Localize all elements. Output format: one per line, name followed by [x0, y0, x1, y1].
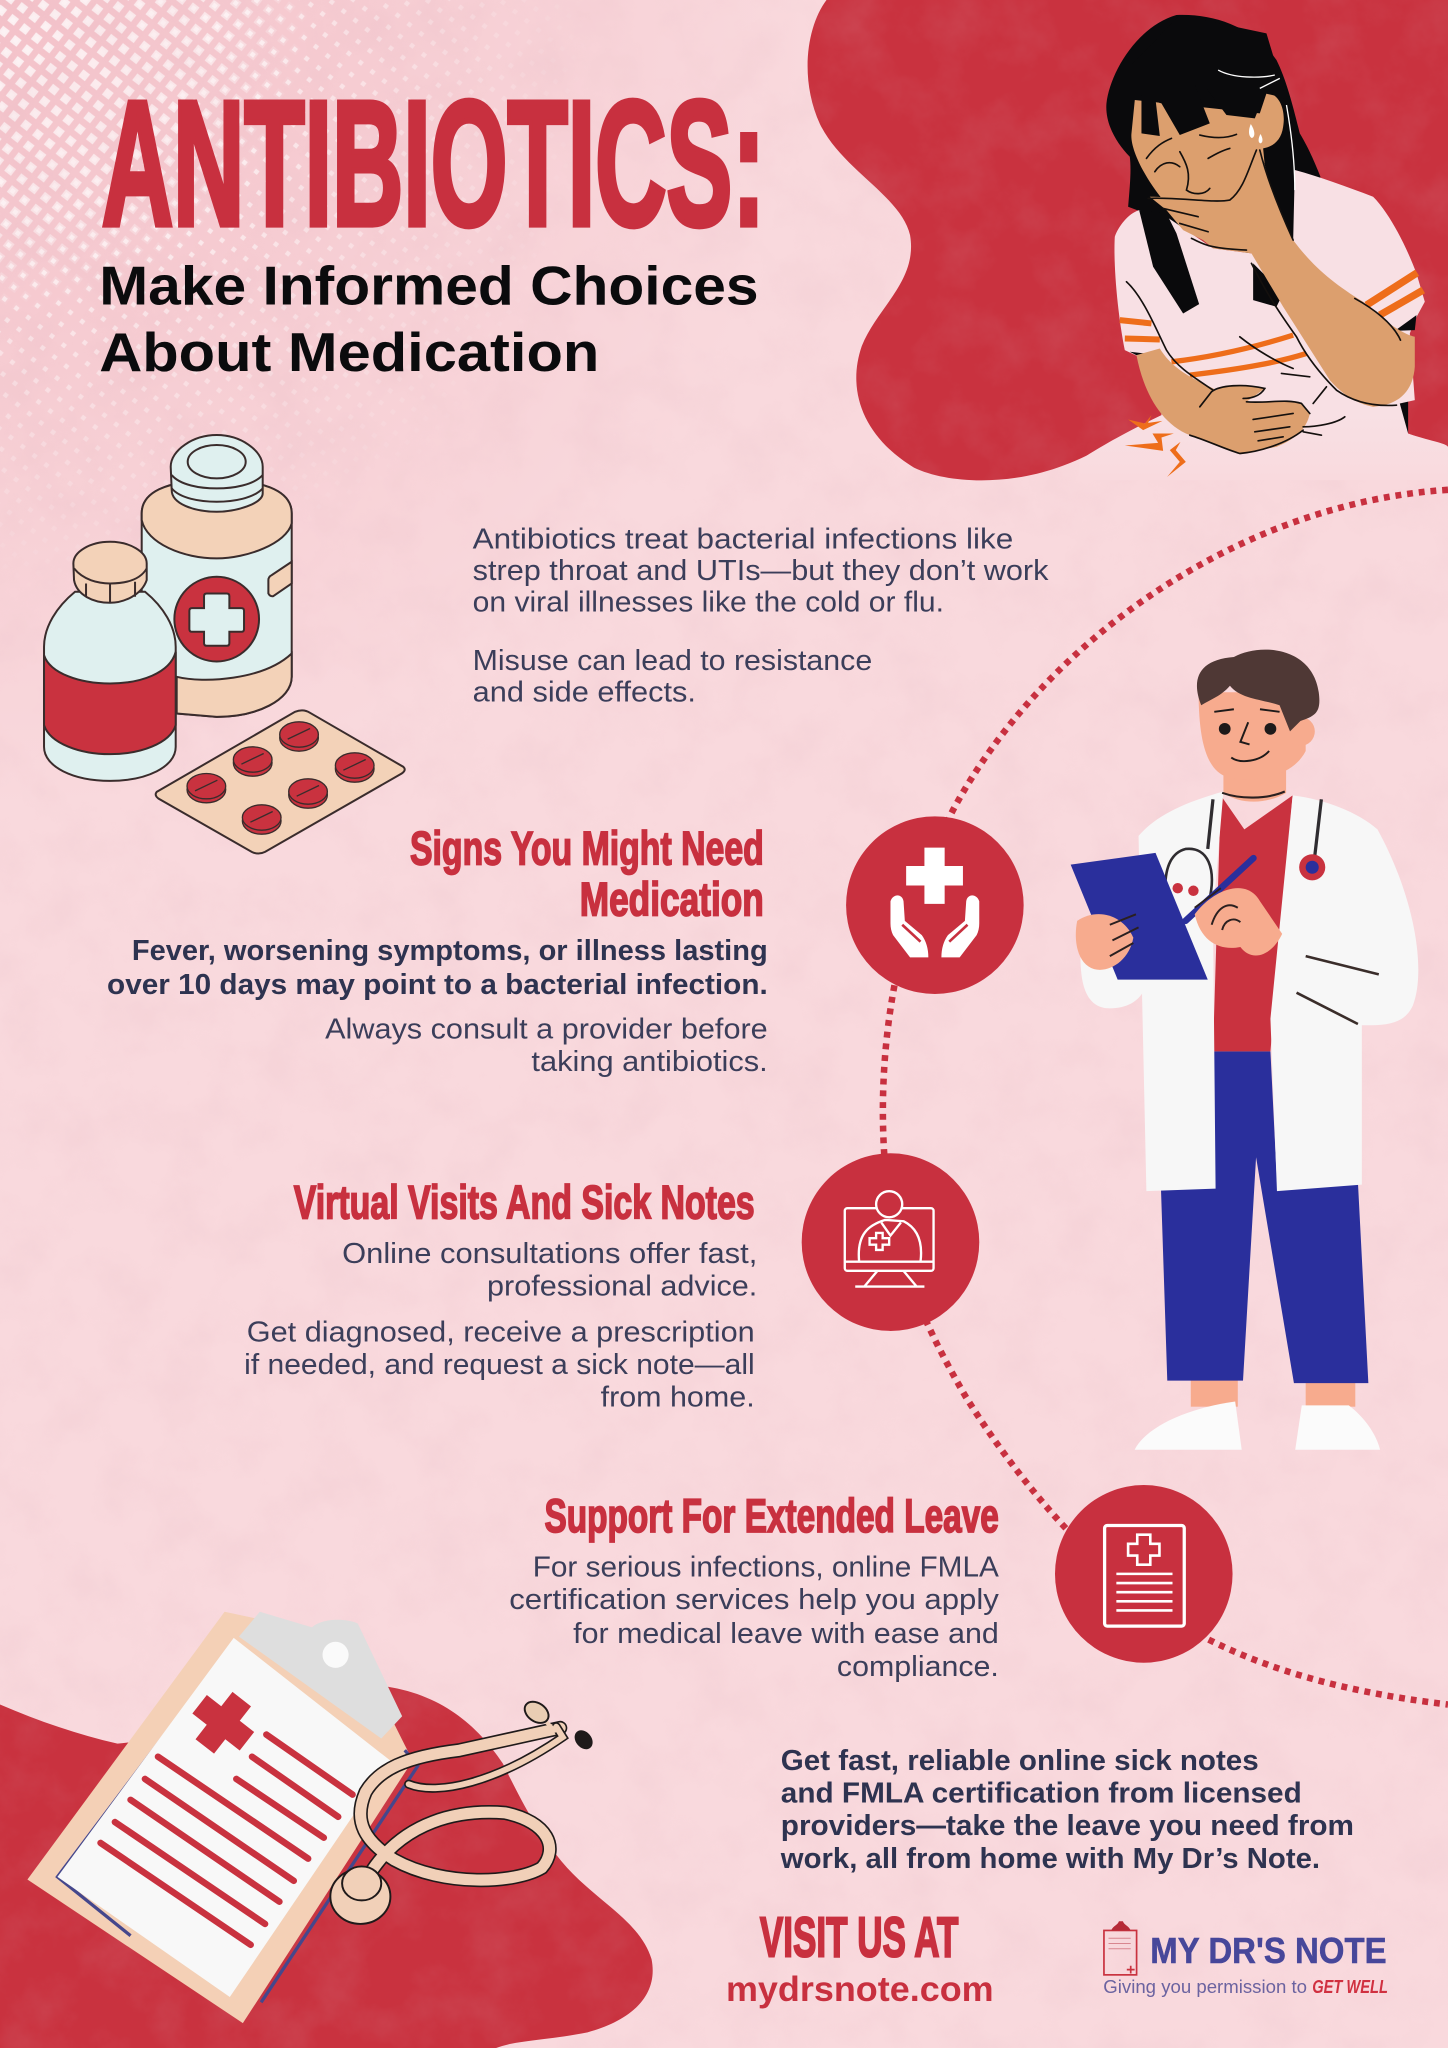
- pain marks: [1125, 415, 1186, 477]
- logo: my dr's note: [1103, 1921, 1388, 1997]
- board: [27, 1612, 413, 2023]
- text: signs details: Fever, worsening symptoms, or illness lasting: [132, 935, 768, 967]
- text: signs details: Always consult a provider before: [325, 1013, 768, 1045]
- legs skin: [1191, 1378, 1238, 1407]
- icon: logo clipboard: [1104, 1921, 1137, 1975]
- step icon: medical document: [1055, 1485, 1233, 1663]
- lower arm and hand on stomach: [1136, 348, 1310, 453]
- intro text: on viral illnesses like the cold or flu.: [473, 586, 944, 618]
- text: virtual visits details: from home.: [601, 1382, 755, 1414]
- text: virtual visits details: Get diagnosed, receive a prescription: [247, 1316, 755, 1348]
- call to action text: [780, 1745, 1354, 1875]
- logo: my dr's note: MY DR'S NOTE: [1150, 1930, 1387, 1971]
- title: ANTIBIOTICS:: [102, 64, 765, 263]
- intro text: strep throat and UTIs—but they don’t work: [473, 555, 1049, 587]
- visit us heading: VISIT US AT: [760, 1906, 958, 1969]
- long hair strand right: [1253, 263, 1283, 307]
- call to action text: work, all from home with My Dr’s Note.: [780, 1843, 1320, 1875]
- shirt: [1080, 170, 1448, 480]
- large bottle: [142, 435, 292, 717]
- subtitle: Make Informed Choices: [99, 254, 759, 316]
- illustration: sick girl holding face and stomach: [1080, 15, 1448, 480]
- illustration: medicine bottles and blister pack: [44, 435, 405, 854]
- heading: support for extended leave: Support For Extended Leave: [544, 1489, 999, 1542]
- blister pack: [156, 710, 405, 854]
- text: signs details: taking antibiotics.: [531, 1046, 768, 1078]
- heading: signs you might need medication: Medication: [580, 873, 764, 926]
- hair back: [1106, 15, 1320, 253]
- intro text: [473, 524, 1049, 708]
- call to action text: Get fast, reliable online sick notes: [781, 1745, 1259, 1777]
- text: extended leave details: [509, 1551, 1000, 1683]
- logo: my dr's note: GET WELL: [1312, 1976, 1388, 1997]
- text: virtual visits details: Online consultations offer fast,: [342, 1238, 757, 1270]
- shoes: [1135, 1401, 1242, 1450]
- hair behind waist: [1380, 398, 1408, 433]
- website link: mydrsnote.com: [726, 1970, 994, 2009]
- form lines: [101, 1735, 353, 1945]
- line work: [1126, 134, 1400, 453]
- step icon: doctor on computer monitor: [802, 1153, 979, 1331]
- heading: signs you might need medication: [410, 822, 764, 926]
- paper: [57, 1638, 390, 1997]
- red shirt: [1213, 795, 1293, 1051]
- step icon: hands holding medical cross: [846, 816, 1024, 994]
- text: signs details: over 10 days may point to a bacterial infection.: [107, 969, 768, 1001]
- stethoscope: [1208, 799, 1321, 856]
- intro text: and side effects.: [473, 676, 696, 708]
- illustration: stethoscope: [330, 1697, 596, 1924]
- call to action text: providers—take the leave you need from: [781, 1810, 1354, 1842]
- coat right panel and sleeve: [1270, 795, 1418, 1191]
- call to action text: and FMLA certification from licensed: [781, 1777, 1302, 1809]
- text: virtual visits details: [244, 1238, 757, 1414]
- dotted connector arc: [883, 490, 1448, 1704]
- logo: my dr's note: Giving you permission to: [1103, 1976, 1307, 1997]
- trousers: [1161, 1051, 1368, 1383]
- subtitle: [99, 254, 759, 383]
- long hair strand left: [1139, 210, 1199, 313]
- sleeve cuff: [1395, 315, 1416, 331]
- red cross: [181, 1681, 265, 1765]
- background: [0, 0, 532, 532]
- clip: [239, 1612, 402, 1738]
- text: virtual visits details: professional advice.: [487, 1271, 757, 1303]
- text: extended leave details: for medical leave with ease and: [573, 1618, 999, 1650]
- text: extended leave details: certification services help you apply: [509, 1584, 1000, 1616]
- clipboard: [1071, 853, 1208, 980]
- face: [1131, 93, 1284, 203]
- coat creases: [1297, 956, 1379, 1024]
- facial features: [1219, 723, 1231, 735]
- hair: [1197, 650, 1319, 731]
- coat left panel: [1139, 792, 1223, 1191]
- illustration: clipboard with medical form: [27, 1612, 418, 2023]
- text: extended leave details: For serious infections, online FMLA: [533, 1551, 1000, 1583]
- orange stripes: [1120, 273, 1423, 375]
- heading: virtual visits and sick notes: Virtual Visits And Sick Notes: [294, 1176, 755, 1229]
- right hand: [1195, 888, 1282, 955]
- illustration: doctor with clipboard: [1071, 650, 1418, 1450]
- top right red blob: [808, 0, 1448, 480]
- small bottle: [44, 542, 176, 781]
- left sleeve: [1081, 914, 1149, 1008]
- heading: signs you might need medication: Signs You Might Need: [410, 822, 764, 875]
- subtitle: About Medication: [99, 321, 599, 383]
- left hand: [1076, 914, 1133, 970]
- intro text: Misuse can lead to resistance: [473, 645, 872, 677]
- upper arm and hand at mouth: [1150, 150, 1415, 407]
- head: [1199, 692, 1306, 779]
- text: virtual visits details: if needed, and request a sick note—all: [244, 1349, 755, 1381]
- intro text: Antibiotics treat bacterial infections like: [473, 524, 1013, 556]
- tears and hair highlights: [1249, 124, 1254, 138]
- text: extended leave details: compliance.: [837, 1651, 999, 1683]
- text: signs details: [107, 935, 768, 1078]
- bangs: [1130, 15, 1286, 136]
- neck: [1223, 764, 1286, 802]
- pen: [1186, 858, 1253, 921]
- bottom left red blob: [0, 1684, 653, 2048]
